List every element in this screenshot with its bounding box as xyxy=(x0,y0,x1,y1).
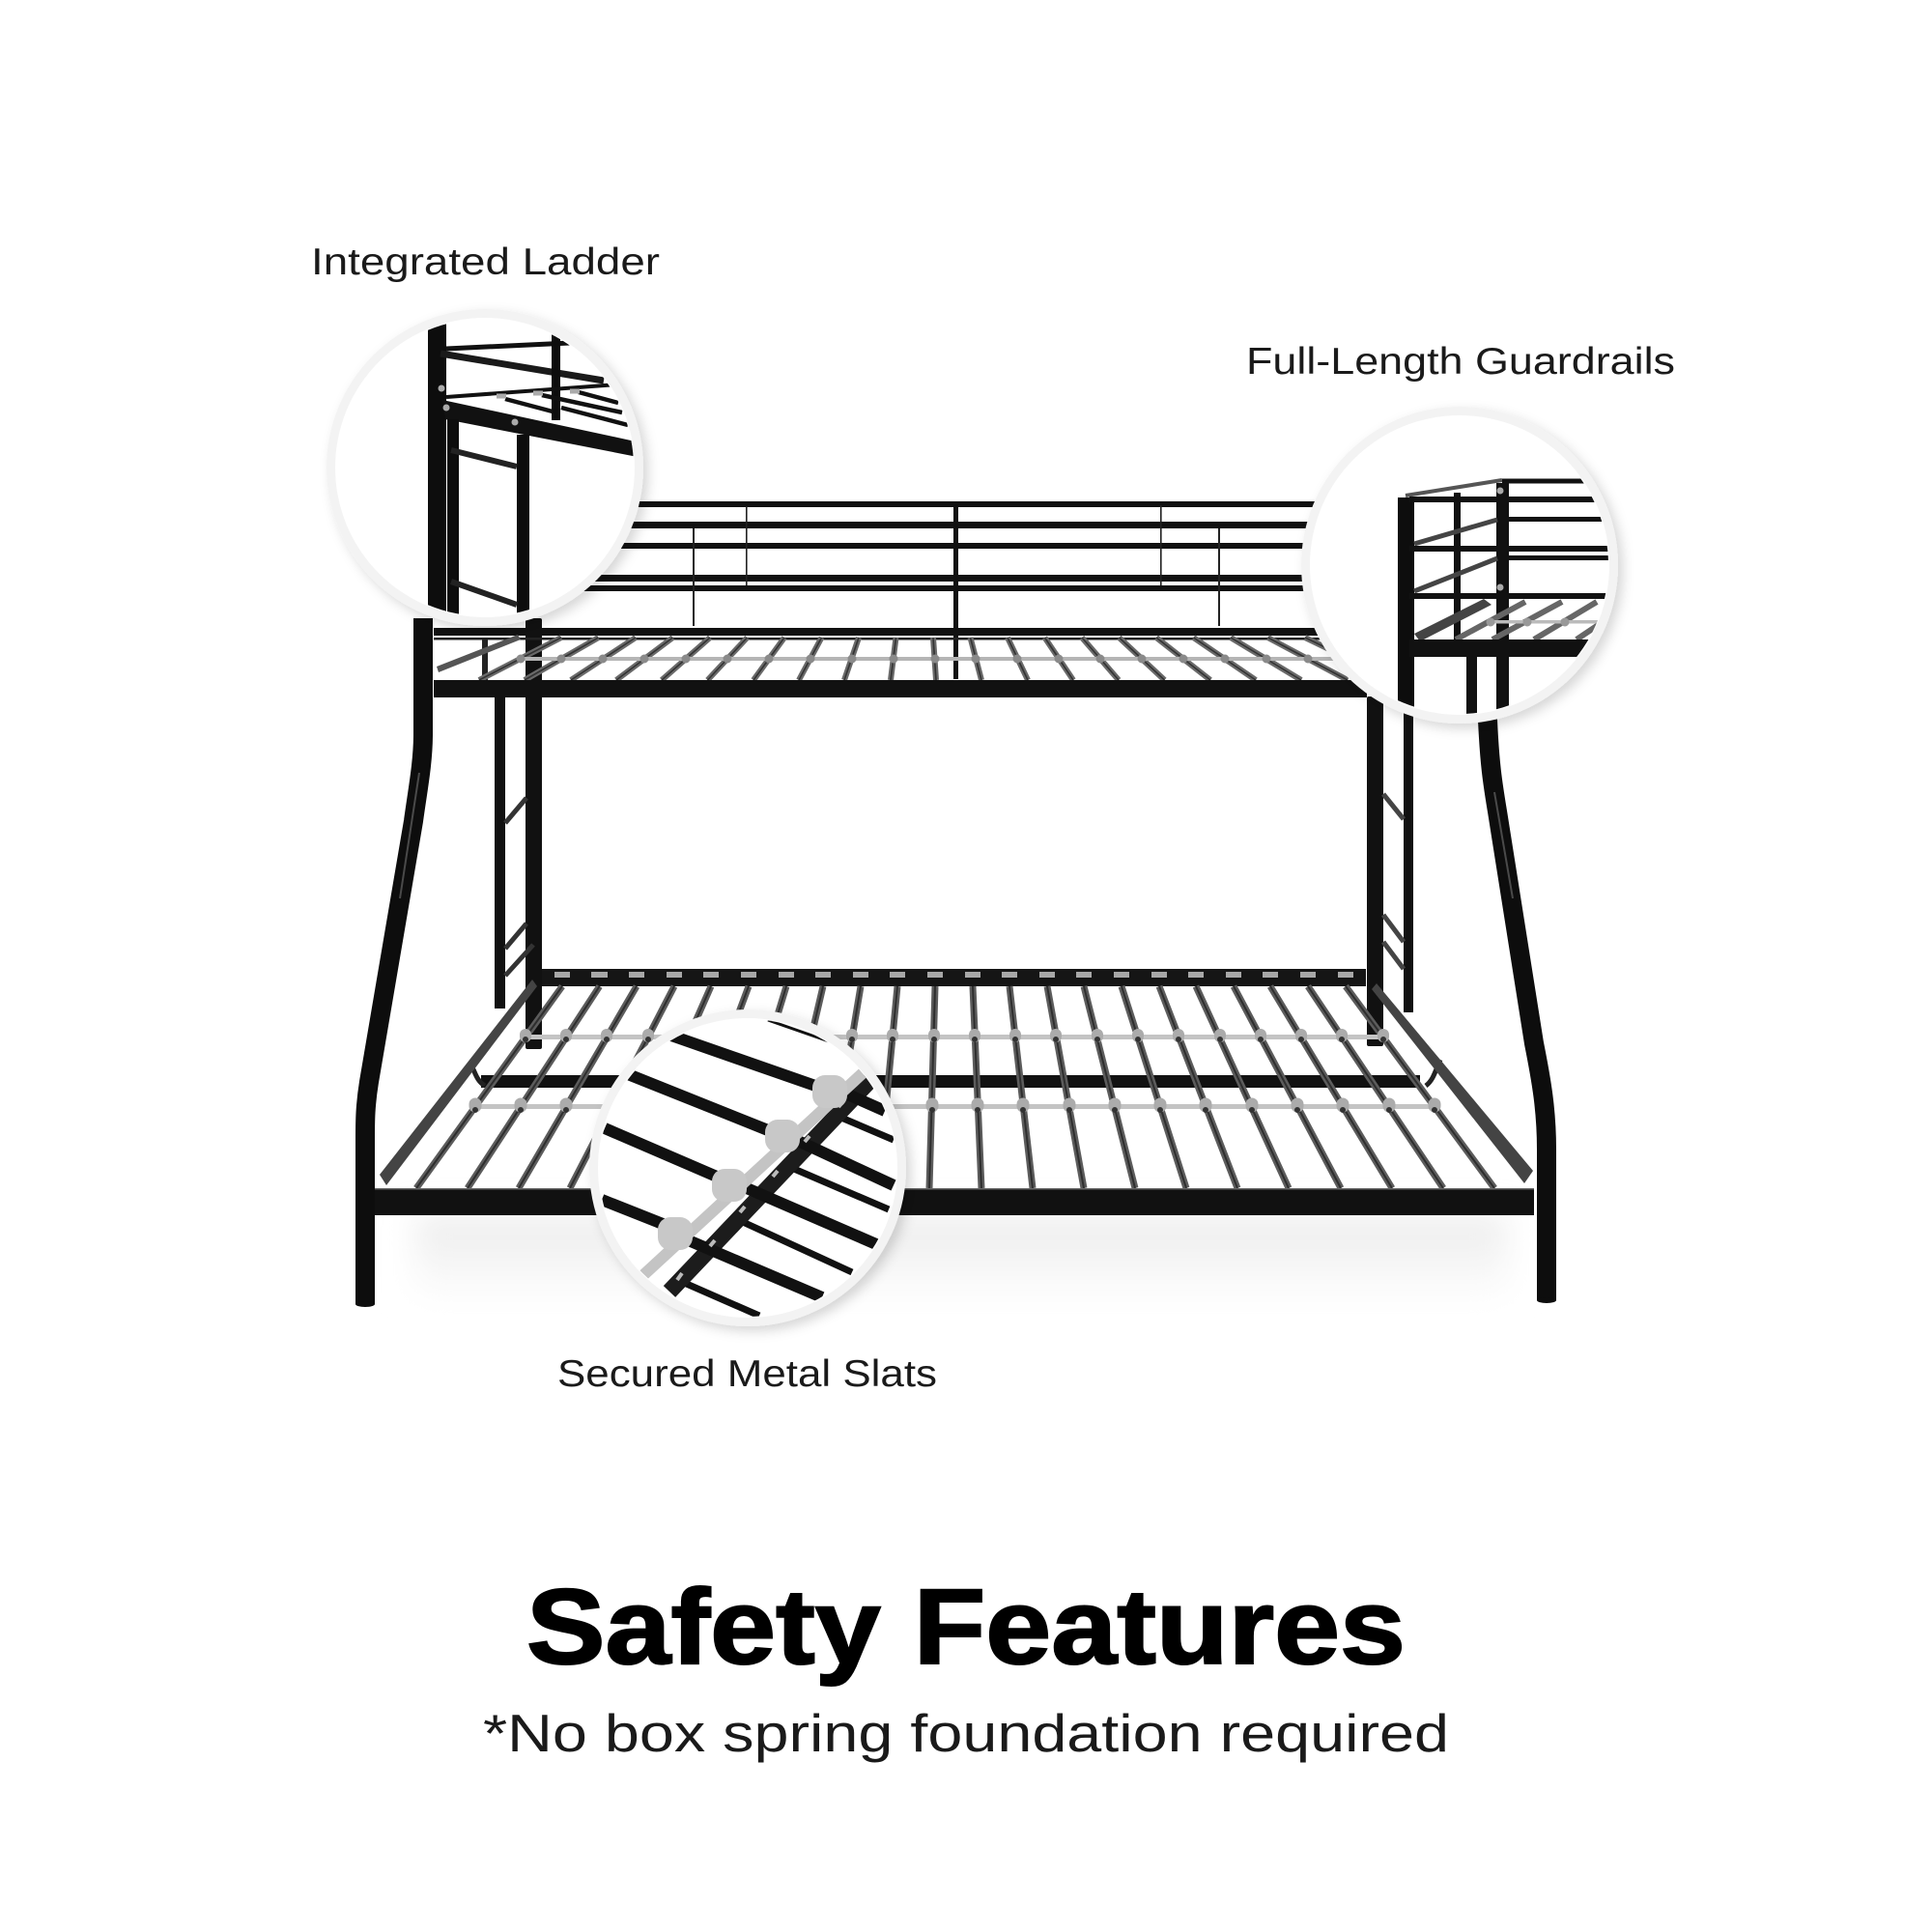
subtitle: *No box spring foundation required xyxy=(483,1703,1449,1763)
right ladder xyxy=(1367,696,1413,1046)
upper platform slat clips xyxy=(521,655,1350,663)
lower rear cross beam xyxy=(469,1060,1440,1088)
upper guardrail xyxy=(580,501,1323,679)
label: full-length guardrails: Full-Length Guardrails xyxy=(1246,341,1675,383)
left ladder xyxy=(482,618,542,1049)
lower front beam xyxy=(375,1188,1534,1215)
upper platform cross bar xyxy=(521,657,1350,661)
lower platform cross bars xyxy=(475,1035,1435,1109)
right curved leg xyxy=(1488,720,1556,1303)
upper platform slats xyxy=(479,638,1393,680)
title: Safety Features xyxy=(526,1568,1406,1687)
label: integrated ladder: Integrated Ladder xyxy=(311,242,660,283)
left curved leg xyxy=(355,618,423,1307)
callout circle: integrated ladder xyxy=(327,309,643,626)
guardrail detail xyxy=(1398,480,1609,715)
slat detail xyxy=(602,1020,894,1316)
bunk bed frame xyxy=(355,501,1556,1307)
infographic canvas xyxy=(315,247,1673,1762)
upper front beam xyxy=(434,680,1367,697)
callout circle: full-length guardrails xyxy=(1301,407,1618,724)
callout circle: secured metal slats xyxy=(589,1009,906,1326)
upper platform rear rail xyxy=(434,628,1332,636)
lower rear beam xyxy=(542,969,1366,986)
lower platform slat clips xyxy=(475,1035,1435,1110)
lower slat tabs xyxy=(554,972,1353,978)
ladder detail xyxy=(428,324,638,618)
label: secured metal slats: Secured Metal Slats xyxy=(557,1353,937,1395)
upper platform side rail xyxy=(437,635,521,672)
lower side rails xyxy=(380,980,1533,1185)
lower platform slats xyxy=(416,986,1494,1188)
floor shadow xyxy=(415,1215,1507,1304)
